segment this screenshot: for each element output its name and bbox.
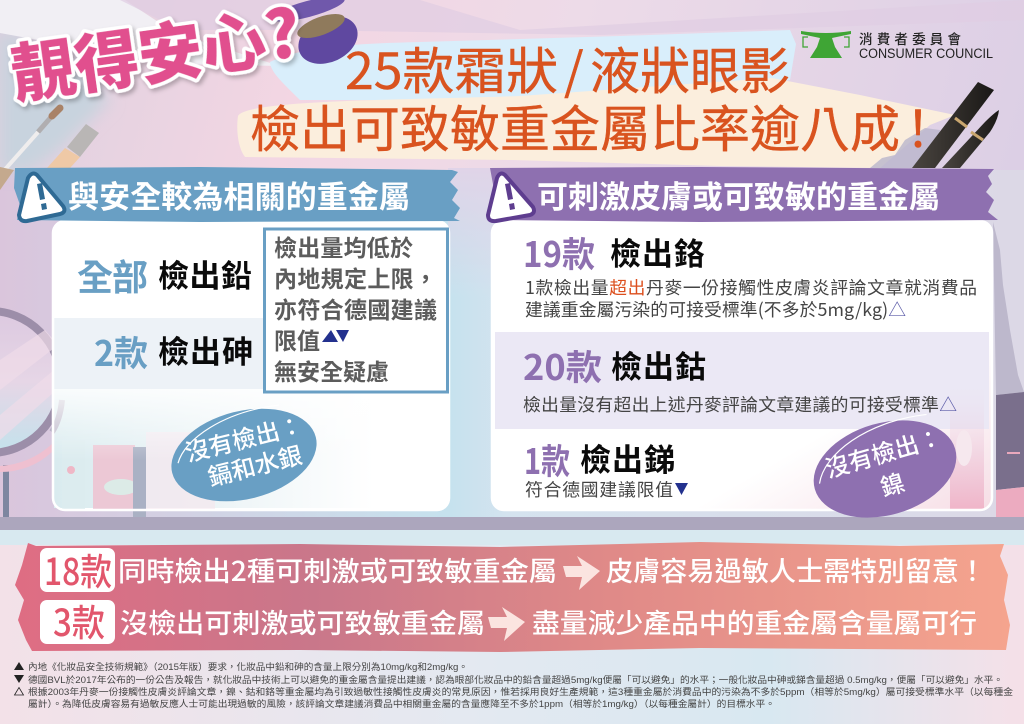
footnotes: 根據2003年丹麥一份接觸性皮膚炎評論文章，鎳、鈷和鉻等重金屬均為引致過敏性接觸性皮膚炎的常見原因，惟若採用良好生產規範，這3種重金屬於消費品中的污染為不多於5ppm（相等於5mg/kg）屬可接受標準水平（以每種金: [28, 686, 1014, 697]
row: cobalt: [523, 340, 957, 417]
line 2 text: 沒檢出可刺激或可致敏重金屬: [120, 602, 485, 641]
row: cobalt: 20款: [523, 340, 602, 391]
row: antimony: 1款: [524, 434, 570, 485]
left header band: 與安全較為相關的重金屬: [68, 172, 410, 217]
line 2 conclusion: 盡量減少產品中的重金屬含量屬可行: [532, 602, 977, 641]
right header band: 可刺激皮膚或可致敏的重金屬: [537, 172, 940, 217]
row: chromium: 19款: [523, 227, 595, 278]
callout: below limits: 限值: [274, 328, 320, 354]
badge: not detected nickel: [802, 405, 968, 533]
mist behind eyeliners: [870, 128, 940, 168]
logo: Consumer Council: [801, 28, 993, 61]
callout: below limits: 亦符合德國建議: [274, 297, 437, 323]
callout: below limits: [264, 229, 448, 392]
row: cobalt: 檢出量沒有超出上述丹麥評論文章建議的可接受標準△: [523, 391, 957, 417]
title blob: cream: [237, 78, 955, 168]
title line 1: 25款霜狀: [345, 32, 558, 104]
arrow 1: [563, 556, 600, 590]
decoration: right-hand column: [993, 222, 1024, 517]
callout: below limits: 無安全疑慮: [274, 359, 389, 385]
footnotes: [14, 661, 1014, 709]
row: chromium: 1款檢出量超出丹麥一份接觸性皮膚炎評論文章就消費品: [525, 274, 977, 300]
logo: Consumer Council: CONSUMER COUNCIL: [859, 46, 993, 61]
jar icon: [269, 0, 365, 73]
left white card: [52, 221, 449, 517]
panel: irritant metals: [488, 167, 998, 533]
pill: 18 models: 18款: [44, 542, 112, 596]
panel: summary band: [15, 542, 1010, 652]
title line 1: [345, 32, 790, 104]
row: antimony: 符合德國建議限值: [525, 476, 673, 502]
badge: not detected cadmium mercury: 鎘和水銀: [204, 436, 305, 493]
right white card: [492, 221, 992, 510]
title line 2: ！: [893, 90, 943, 162]
line 1 conclusion: 皮膚容易過敏人士需特別留意！: [606, 550, 986, 589]
badge: not detected nickel: 沒有檢出：: [821, 418, 946, 485]
badge: not detected nickel: 鎳: [876, 463, 909, 503]
row: antimony: 檢出銻: [580, 435, 675, 480]
eyeliner icons: [912, 82, 999, 168]
arrow 2: [488, 607, 525, 641]
badge: not detected cadmium mercury: [162, 394, 326, 516]
row: arsenic: 檢出砷: [158, 327, 253, 372]
title blob: light blue: [270, 30, 796, 100]
title line 1: /: [564, 32, 584, 104]
row: chromium: 檢出鉻: [610, 229, 705, 274]
callout: below limits: 內地規定上限，: [274, 266, 437, 292]
mirror decoration: [0, 311, 62, 517]
row: all detected lead: 檢出鉛: [158, 251, 252, 296]
logo: Consumer Council: 消費者委員會: [859, 28, 962, 48]
brush and concealer icons: [0, 108, 99, 190]
row: all detected lead: 全部: [77, 249, 148, 301]
row: cobalt: 檢出鈷: [611, 342, 706, 387]
callout: below limits: 檢出量均低於: [274, 235, 413, 261]
footnotes: 內地《化妝品安全技術規範》（2015年版）要求，化妝品中鉛和砷的含量上限分別為10mg/kg和2mg/kg。: [28, 661, 468, 672]
footnotes: 屬計）。為降低皮膚容易有過敏反應人士可能出現過敏的風險，該評論文章建議消費品中相關重金屬的含量應降至不多於1ppm（相等於1mg/kg）（以每種金屬計）的目標水平。: [28, 698, 775, 709]
pill: 3 models: 3款: [53, 593, 105, 647]
badge: not detected cadmium mercury: 沒有檢出：: [181, 406, 306, 469]
line 1 text: 同時檢出2種可刺激或可致敏重金屬: [118, 550, 557, 589]
footnotes: 德國BVL於2017年公布的一份公告及報告，就化妝品中技術上可以避免的重金屬含量提出建議，認為眼部化妝品中的鉛含量超過5mg/kg便屬「可以避免」的水平；一般化妝品中砷或銻含量超過 0.5mg/kg，便屬「可以避免」水平。: [28, 674, 1003, 685]
title line 2: 檢出可致敏重金屬比率逾八成: [250, 90, 900, 162]
row: all detected lead: [77, 249, 252, 301]
icon: right warning triangle: [488, 174, 534, 221]
row: arsenic: 2款: [94, 326, 148, 377]
row: arsenic: [94, 326, 253, 377]
row: chromium: [523, 227, 977, 322]
row: chromium: 建議重金屬污染的可接受標準(不多於5mg/kg)△: [525, 296, 906, 322]
left header band: [14, 167, 460, 222]
right header band: [490, 167, 998, 222]
icon: left warning triangle: [19, 174, 64, 221]
row: antimony: [524, 434, 688, 502]
panel: safety metals: [14, 167, 460, 517]
title line 1: 液狀眼影: [590, 32, 790, 104]
